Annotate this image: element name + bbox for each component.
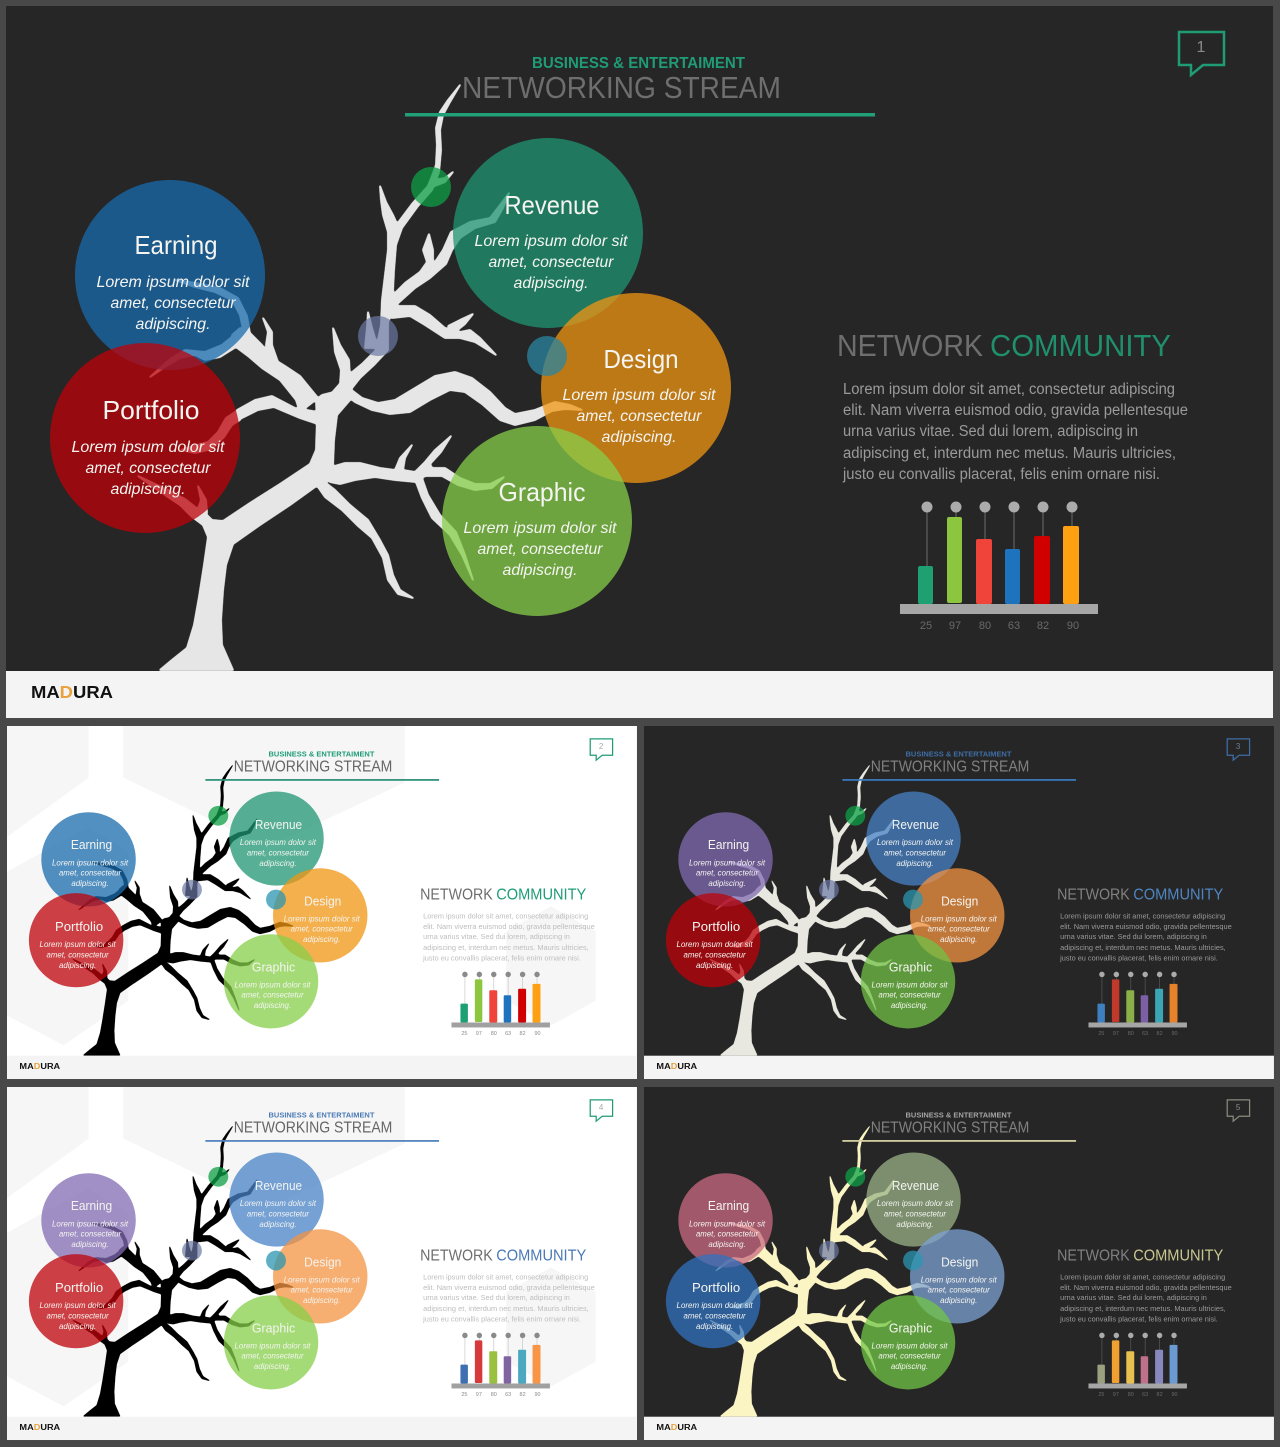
paragraph (1059, 1272, 1232, 1324)
circle: Graphic: amet, consectetur (241, 991, 304, 1000)
circle: Earning: adipiscing. (71, 879, 109, 888)
icon: speech bubble (590, 739, 613, 760)
circle: Portfolio: adipiscing. (696, 1322, 733, 1331)
heading: networking stream: NETWORKING STREAM (234, 1120, 392, 1137)
bar chart (1088, 972, 1187, 1037)
bar chart: 90 (1067, 620, 1079, 632)
bar chart: 90 (1171, 1031, 1178, 1037)
paragraph: urna varius vitae. Sed dui lorem, adipiscing in (1060, 932, 1207, 941)
icon: speech bubble (1227, 1100, 1250, 1121)
circle: Graphic: adipiscing. (254, 1001, 291, 1010)
circle: Portfolio: amet, consectetur (684, 1312, 746, 1321)
heading: networking stream: NETWORKING STREAM (871, 1120, 1029, 1137)
slide background (7, 1087, 637, 1440)
icon: speech bubble (590, 1100, 613, 1121)
circle: Design (273, 868, 367, 962)
paragraph: Lorem ipsum dolor sit amet, consectetur adipiscing (423, 911, 588, 920)
circle: Portfolio: Lorem ipsum dolor sit (677, 940, 753, 949)
circle: Revenue: adipiscing. (259, 1220, 297, 1229)
slide background (644, 726, 1274, 1079)
circle: Earning: Earning (71, 1198, 112, 1213)
circle: Earning: adipiscing. (136, 316, 210, 333)
small teal dot (903, 890, 923, 909)
paragraph: justo eu convallis placerat, felis enim ornare nisi. (422, 954, 581, 963)
paragraph: Lorem ipsum dolor sit amet, consectetur adipiscing (843, 381, 1175, 398)
circle: Revenue (866, 1152, 961, 1247)
circle: Design (910, 1229, 1004, 1323)
circle: Graphic (442, 426, 632, 616)
bar chart: 63 (1008, 620, 1020, 632)
paragraph (422, 1272, 595, 1324)
heading: network community: NETWORK (1057, 1248, 1130, 1265)
circle: Design (910, 868, 1004, 962)
bar chart: 97 (1113, 1031, 1119, 1037)
bar chart: 80 (491, 1031, 497, 1037)
circle: Portfolio: Lorem ipsum dolor sit (677, 1301, 753, 1310)
circle: Earning: Earning (708, 837, 749, 852)
paragraph: urna varius vitae. Sed dui lorem, adipiscing in (423, 1293, 570, 1302)
circle: Earning: Lorem ipsum dolor sit (689, 858, 766, 867)
circle: Portfolio: amet, consectetur (684, 951, 746, 960)
circle: Graphic: Graphic (252, 1320, 296, 1335)
circle: Graphic: Lorem ipsum dolor sit (464, 520, 617, 537)
slide 2: white slide, teal theme (7, 726, 637, 1079)
paragraph: elit. Nam viverra euismod odio, gravida pellentesque (423, 1283, 595, 1292)
bar chart: 97 (476, 1031, 482, 1037)
slide background (6, 6, 1273, 718)
circle: Earning: amet, consectetur (110, 295, 236, 312)
logo: MADURA: MADURA (19, 1422, 61, 1432)
paragraph: urna varius vitae. Sed dui lorem, adipiscing in (1060, 1293, 1207, 1302)
paragraph: justo eu convallis placerat, felis enim ornare nisi. (842, 466, 1160, 483)
circle: Portfolio (666, 1254, 760, 1348)
circle: Graphic: amet, consectetur (241, 1352, 304, 1361)
circle: Earning: Lorem ipsum dolor sit (689, 1219, 766, 1228)
bar chart: 25 (1098, 1392, 1104, 1398)
heading: network community: COMMUNITY (496, 1248, 586, 1265)
slide 1: large dark slide (6, 6, 1273, 718)
circle: Revenue: amet, consectetur (488, 254, 614, 271)
tree illustration (138, 85, 582, 670)
bar chart: 63 (1142, 1392, 1148, 1398)
circle: Design: amet, consectetur (928, 1286, 990, 1295)
circle: Portfolio: Portfolio (692, 919, 740, 934)
small green dot (208, 806, 228, 826)
circle: Graphic (861, 934, 955, 1028)
circle: Portfolio (666, 893, 760, 987)
circle: Graphic: Lorem ipsum dolor sit (871, 980, 948, 989)
bar chart: 80 (491, 1392, 497, 1398)
small green dot (411, 167, 451, 207)
circle: Graphic: adipiscing. (502, 562, 578, 579)
title underline (205, 1140, 439, 1142)
paragraph (422, 911, 595, 963)
heading: business and entertainment: BUSINESS & ENTERTAIMENT (269, 750, 375, 759)
circle: Portfolio (29, 1254, 123, 1348)
tree illustration (710, 765, 930, 1055)
circle: Earning: Earning (71, 837, 112, 852)
circle: Revenue: Revenue (504, 190, 600, 220)
circle: Earning (678, 1173, 773, 1267)
circle: Design: adipiscing. (602, 429, 676, 446)
circle: Revenue: Revenue (255, 817, 302, 832)
circle: Revenue: amet, consectetur (884, 848, 946, 857)
circle: Earning: adipiscing. (708, 1240, 746, 1249)
circle: Graphic (861, 1295, 955, 1389)
footer bar (644, 1056, 1274, 1079)
circle: Earning: Lorem ipsum dolor sit (52, 1219, 129, 1228)
heading: network community: COMMUNITY (496, 887, 586, 904)
paragraph: justo eu convallis placerat, felis enim ornare nisi. (422, 1315, 581, 1324)
circle: Portfolio: Portfolio (55, 1280, 103, 1295)
paragraph: urna varius vitae. Sed dui lorem, adipiscing in (843, 423, 1138, 440)
circle: Portfolio: Portfolio (692, 1280, 740, 1295)
circle: Portfolio: adipiscing. (696, 961, 733, 970)
paragraph: adipiscing et, interdum nec metus. Mauris ultricies, (423, 943, 589, 952)
paragraph: adipiscing et, interdum nec metus. Mauris ultricies, (843, 445, 1176, 462)
paragraph: justo eu convallis placerat, felis enim ornare nisi. (1059, 1315, 1218, 1324)
circle: Revenue: adipiscing. (896, 859, 934, 868)
bar chart: 63 (505, 1392, 511, 1398)
circle: Design: Lorem ipsum dolor sit (921, 1275, 998, 1284)
circle: Graphic: amet, consectetur (478, 541, 603, 558)
circle: Graphic: amet, consectetur (878, 1352, 941, 1361)
circle: Design: adipiscing. (940, 1296, 977, 1305)
circle: Revenue: Lorem ipsum dolor sit (877, 1199, 954, 1208)
circle: Graphic: adipiscing. (891, 1001, 928, 1010)
small teal dot (527, 336, 567, 376)
paragraph: Lorem ipsum dolor sit amet, consectetur adipiscing (423, 1272, 588, 1281)
small teal dot (903, 1251, 923, 1270)
heading: networking stream: NETWORKING STREAM (871, 759, 1029, 776)
footer bar (644, 1417, 1274, 1440)
circle: Graphic: Graphic (252, 959, 296, 974)
bar chart: 90 (534, 1392, 541, 1398)
bar chart: 82 (1037, 620, 1049, 632)
bar chart: 82 (1157, 1392, 1163, 1398)
circle: Earning: Lorem ipsum dolor sit (52, 858, 129, 867)
heading: network community: COMMUNITY (990, 328, 1171, 363)
circle: Portfolio: adipiscing. (59, 961, 96, 970)
icon: speech bubble: 1 (1197, 39, 1206, 56)
circle: Revenue: adipiscing. (896, 1220, 934, 1229)
circle: Revenue (229, 1152, 324, 1247)
tree illustration (73, 1126, 293, 1416)
faint hexagon pattern (7, 726, 596, 1045)
circle: Earning: amet, consectetur (696, 1230, 758, 1239)
circle: Design: Lorem ipsum dolor sit (284, 1275, 361, 1284)
bar chart: 25 (920, 620, 932, 632)
circle: Earning (75, 180, 265, 370)
bar chart: 82 (520, 1031, 526, 1037)
circle: Design: adipiscing. (940, 935, 977, 944)
bar chart: 25 (461, 1031, 467, 1037)
heading: business and entertainment: BUSINESS & ENTERTAIMENT (906, 750, 1012, 759)
paragraph (1059, 911, 1232, 963)
circle: Design: Design (941, 1254, 978, 1269)
circle: Revenue: adipiscing. (514, 275, 588, 292)
circle: Graphic: Lorem ipsum dolor sit (234, 980, 311, 989)
circle: Earning (41, 1173, 136, 1267)
slide 3: dark slide, blue theme (644, 726, 1274, 1079)
circle: Revenue: Lorem ipsum dolor sit (877, 838, 954, 847)
circle: Design: Lorem ipsum dolor sit (284, 914, 361, 923)
circle: Portfolio: Portfolio (55, 919, 103, 934)
circle: Revenue: amet, consectetur (884, 1209, 946, 1218)
bar chart: 25 (461, 1392, 467, 1398)
circle: Revenue: amet, consectetur (247, 1209, 309, 1218)
circle: Design: adipiscing. (303, 1296, 340, 1305)
small green dot (208, 1167, 228, 1187)
logo: MADURA: MADURA (656, 1422, 698, 1432)
circle: Portfolio: Lorem ipsum dolor sit (40, 1301, 116, 1310)
heading: network community: NETWORK (1057, 887, 1130, 904)
circle: Revenue: Lorem ipsum dolor sit (474, 233, 628, 250)
bar chart (1088, 1333, 1187, 1398)
paragraph: elit. Nam viverra euismod odio, gravida pellentesque (843, 402, 1188, 419)
paragraph: justo eu convallis placerat, felis enim ornare nisi. (1059, 954, 1218, 963)
title underline (405, 113, 875, 116)
bar chart: 90 (1171, 1392, 1178, 1398)
small purple dot (819, 1241, 839, 1261)
circle: Earning (41, 812, 136, 906)
icon: speech bubble: 3 (1236, 742, 1241, 751)
circle: Portfolio (29, 893, 123, 987)
circle: Graphic (224, 1295, 318, 1389)
circle: Earning: Earning (134, 230, 218, 260)
circle: Portfolio: adipiscing. (110, 481, 186, 498)
heading: networking stream: NETWORKING STREAM (462, 70, 781, 105)
heading: networking stream: NETWORKING STREAM (234, 759, 392, 776)
bar chart: 25 (1098, 1031, 1104, 1037)
circle: Earning: Lorem ipsum dolor sit (96, 274, 250, 291)
circle: Design: Design (941, 893, 978, 908)
title underline (205, 779, 439, 781)
circle: Design: Design (604, 344, 678, 374)
circle: Earning: Earning (708, 1198, 749, 1213)
footer bar (7, 1056, 637, 1079)
paragraph: Lorem ipsum dolor sit amet, consectetur adipiscing (1060, 911, 1225, 920)
heading: network community: NETWORK (420, 1248, 493, 1265)
logo: MADURA: MADURA (656, 1061, 698, 1071)
circle: Revenue: Lorem ipsum dolor sit (240, 1199, 317, 1208)
circle: Earning: amet, consectetur (59, 869, 121, 878)
slide 4: white slide, blue theme (7, 1087, 637, 1440)
circle: Portfolio: amet, consectetur (86, 460, 211, 477)
small teal dot (266, 1251, 286, 1270)
slide background (644, 1087, 1274, 1440)
heading: network community: COMMUNITY (1133, 1248, 1223, 1265)
small purple dot (182, 1241, 202, 1261)
heading: business and entertainment: BUSINESS & ENTERTAIMENT (906, 1111, 1012, 1120)
circle: Earning: adipiscing. (71, 1240, 109, 1249)
circle: Revenue: Revenue (892, 1178, 939, 1193)
circle: Revenue: amet, consectetur (247, 848, 309, 857)
small purple dot (358, 316, 398, 356)
circle: Design: Lorem ipsum dolor sit (921, 914, 998, 923)
circle: Portfolio: Portfolio (102, 395, 200, 425)
circle: Graphic (224, 934, 318, 1028)
circle: Graphic: Graphic (889, 1320, 933, 1335)
paragraph: elit. Nam viverra euismod odio, gravida pellentesque (423, 922, 595, 931)
circle: Design: amet, consectetur (291, 925, 353, 934)
small purple dot (182, 880, 202, 900)
circle: Design: adipiscing. (303, 935, 340, 944)
circle: Design (541, 293, 731, 483)
circle: Revenue (229, 791, 324, 886)
circle: Portfolio: amet, consectetur (47, 951, 109, 960)
heading: network community: NETWORK (420, 887, 493, 904)
circle: Portfolio: adipiscing. (59, 1322, 96, 1331)
circle: Revenue: Revenue (255, 1178, 302, 1193)
circle: Portfolio: Lorem ipsum dolor sit (72, 439, 225, 456)
bar chart: 80 (1128, 1031, 1134, 1037)
icon: speech bubble (1227, 739, 1250, 760)
circle: Revenue: Revenue (892, 817, 939, 832)
paragraph: elit. Nam viverra euismod odio, gravida pellentesque (1060, 1283, 1232, 1292)
circle: Revenue: adipiscing. (259, 859, 297, 868)
circle: Earning: adipiscing. (708, 879, 746, 888)
circle: Design (273, 1229, 367, 1323)
circle: Graphic: amet, consectetur (878, 991, 941, 1000)
paragraph: Lorem ipsum dolor sit amet, consectetur adipiscing (1060, 1272, 1225, 1281)
bar chart: 80 (979, 620, 991, 632)
bar chart: 63 (1142, 1031, 1148, 1037)
circle: Graphic: adipiscing. (891, 1362, 928, 1371)
circle: Design: Design (304, 1254, 341, 1269)
paragraph (842, 381, 1188, 483)
icon: speech bubble: 2 (599, 742, 604, 751)
icon: speech bubble: 4 (599, 1103, 604, 1112)
slide background (7, 726, 637, 1079)
footer bar (7, 1417, 637, 1440)
logo: MADURA: MADURA (19, 1061, 61, 1071)
circle: Graphic: Lorem ipsum dolor sit (234, 1341, 311, 1350)
circle: Portfolio: Lorem ipsum dolor sit (40, 940, 116, 949)
circle: Design: amet, consectetur (928, 925, 990, 934)
circle: Revenue (453, 138, 643, 328)
footer bar (6, 671, 1273, 718)
paragraph: elit. Nam viverra euismod odio, gravida pellentesque (1060, 922, 1232, 931)
bar chart: 97 (1113, 1392, 1119, 1398)
paragraph: adipiscing et, interdum nec metus. Mauris ultricies, (423, 1304, 589, 1313)
circle: Revenue (866, 791, 961, 886)
heading: business and entertainment: BUSINESS & ENTERTAIMENT (269, 1111, 375, 1120)
logo: MADURA: MADURA (31, 682, 113, 702)
heading: network community: NETWORK (837, 328, 983, 363)
circle: Earning: amet, consectetur (696, 869, 758, 878)
bar chart: 97 (949, 620, 961, 632)
circle: Design: Design (304, 893, 341, 908)
icon: speech bubble: 5 (1236, 1103, 1241, 1112)
bar chart: 80 (1128, 1392, 1134, 1398)
bar chart (900, 502, 1098, 632)
bar chart (451, 1333, 550, 1398)
small teal dot (266, 890, 286, 909)
circle: Revenue: Lorem ipsum dolor sit (240, 838, 317, 847)
circle: Design: amet, consectetur (576, 408, 702, 425)
heading: business and entertainment: BUSINESS & ENTERTAIMENT (532, 55, 746, 72)
circle: Portfolio: amet, consectetur (47, 1312, 109, 1321)
bar chart (451, 972, 550, 1037)
small green dot (845, 1167, 865, 1187)
tree illustration (710, 1126, 930, 1416)
circle: Earning: amet, consectetur (59, 1230, 121, 1239)
circle: Graphic: Graphic (498, 477, 586, 507)
title underline (842, 1140, 1076, 1142)
small purple dot (819, 880, 839, 900)
title underline (842, 779, 1076, 781)
paragraph: urna varius vitae. Sed dui lorem, adipiscing in (423, 932, 570, 941)
icon: speech bubble (1179, 32, 1224, 75)
heading: network community: COMMUNITY (1133, 887, 1223, 904)
faint hexagon pattern (7, 1087, 596, 1406)
slide 5: dark slide, cream theme (644, 1087, 1274, 1440)
bar chart: 82 (520, 1392, 526, 1398)
circle: Design: Lorem ipsum dolor sit (562, 387, 716, 404)
circle: Graphic: Lorem ipsum dolor sit (871, 1341, 948, 1350)
circle: Graphic: Graphic (889, 959, 933, 974)
circle: Design: amet, consectetur (291, 1286, 353, 1295)
bar chart: 63 (505, 1031, 511, 1037)
bar chart: 90 (534, 1031, 541, 1037)
small green dot (845, 806, 865, 826)
paragraph: adipiscing et, interdum nec metus. Mauris ultricies, (1060, 943, 1226, 952)
bar chart: 97 (476, 1392, 482, 1398)
circle: Earning (678, 812, 773, 906)
tree illustration (73, 765, 293, 1055)
paragraph: adipiscing et, interdum nec metus. Mauris ultricies, (1060, 1304, 1226, 1313)
bar chart: 82 (1157, 1031, 1163, 1037)
circle: Portfolio (50, 343, 240, 533)
circle: Graphic: adipiscing. (254, 1362, 291, 1371)
